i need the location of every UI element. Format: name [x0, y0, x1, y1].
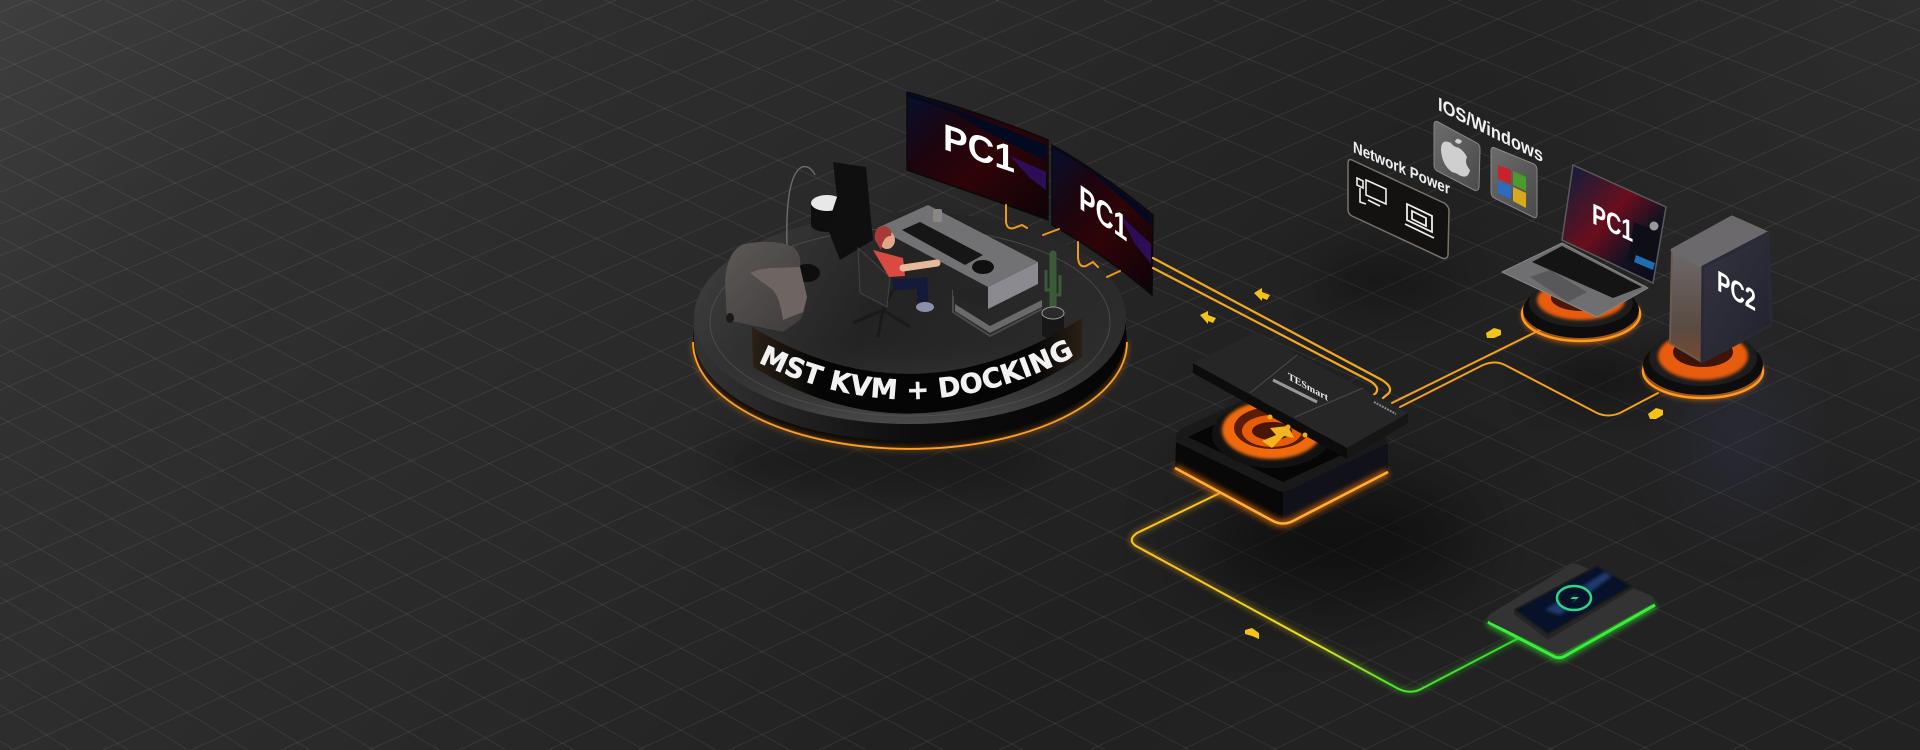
cactus plant: [1042, 254, 1064, 339]
label: IOS/Windows: IOS/Windows: [1438, 94, 1543, 167]
arrow: [1254, 288, 1270, 301]
wires: KVM to PC1 laptop and PC2: [1392, 330, 1658, 416]
arrow: [1245, 628, 1259, 639]
keyboard: [902, 222, 983, 265]
laptop base: [1502, 243, 1648, 317]
floor shadows and ambient light: [710, 250, 1790, 600]
cup: [933, 209, 942, 222]
ring base: [1643, 330, 1763, 400]
wires: monitors to KVM: [1153, 258, 1390, 398]
icon: network monitor: [1357, 178, 1386, 206]
floor lamp: [787, 167, 843, 282]
platform base with orange rim: [693, 212, 1127, 449]
TESmart logo: TESmart: [1288, 371, 1328, 404]
office chair and seated person: [853, 226, 937, 337]
glowing ring with arrows: [1212, 400, 1332, 468]
panel: workstation platform: [688, 91, 1154, 454]
flow arrows: [1200, 288, 1663, 639]
laptop screen: [1562, 165, 1666, 283]
label: PC1: PC1: [1079, 176, 1127, 250]
floating tiles: IOS and Windows: [1434, 94, 1543, 218]
label: PC2: PC2: [1717, 263, 1756, 318]
panel: network and power icons: [1348, 160, 1449, 259]
floating tiles: network and power: [1348, 138, 1450, 259]
banner: MST KVM + DOCKING: MST KVM + DOCKING: [760, 340, 1073, 400]
mouse: [972, 260, 994, 274]
monitor cables: [1006, 205, 1120, 277]
monitor 1: [907, 92, 1048, 220]
dark acoustic panel: [827, 162, 873, 260]
arrow: [1200, 311, 1216, 324]
phone: [1515, 566, 1632, 638]
arrow: [1486, 328, 1501, 338]
icon: windows tile: [1491, 147, 1537, 218]
device: phone on wireless charger: [1488, 564, 1655, 658]
icon: power laptop: [1405, 204, 1434, 238]
label: PC1: PC1: [1592, 197, 1633, 249]
monitor 2: [1052, 145, 1153, 295]
KVM stand: [1175, 385, 1388, 524]
model plate: [1273, 380, 1317, 402]
label: Network Power: Network Power: [1353, 138, 1450, 199]
icon: apple tile: [1434, 121, 1480, 191]
label: PC1: PC1: [943, 117, 1015, 182]
armchair: [725, 242, 807, 332]
device: PC1 laptop on glowing ring: [1502, 165, 1666, 344]
wire: KVM to phone charger: [1132, 493, 1517, 692]
device: PC2 mini computer on glowing ring: [1643, 217, 1771, 400]
ring base: [1522, 279, 1640, 344]
desk: [877, 205, 1042, 336]
device: KVM switch: [1193, 332, 1408, 459]
arrow: [1648, 408, 1663, 419]
